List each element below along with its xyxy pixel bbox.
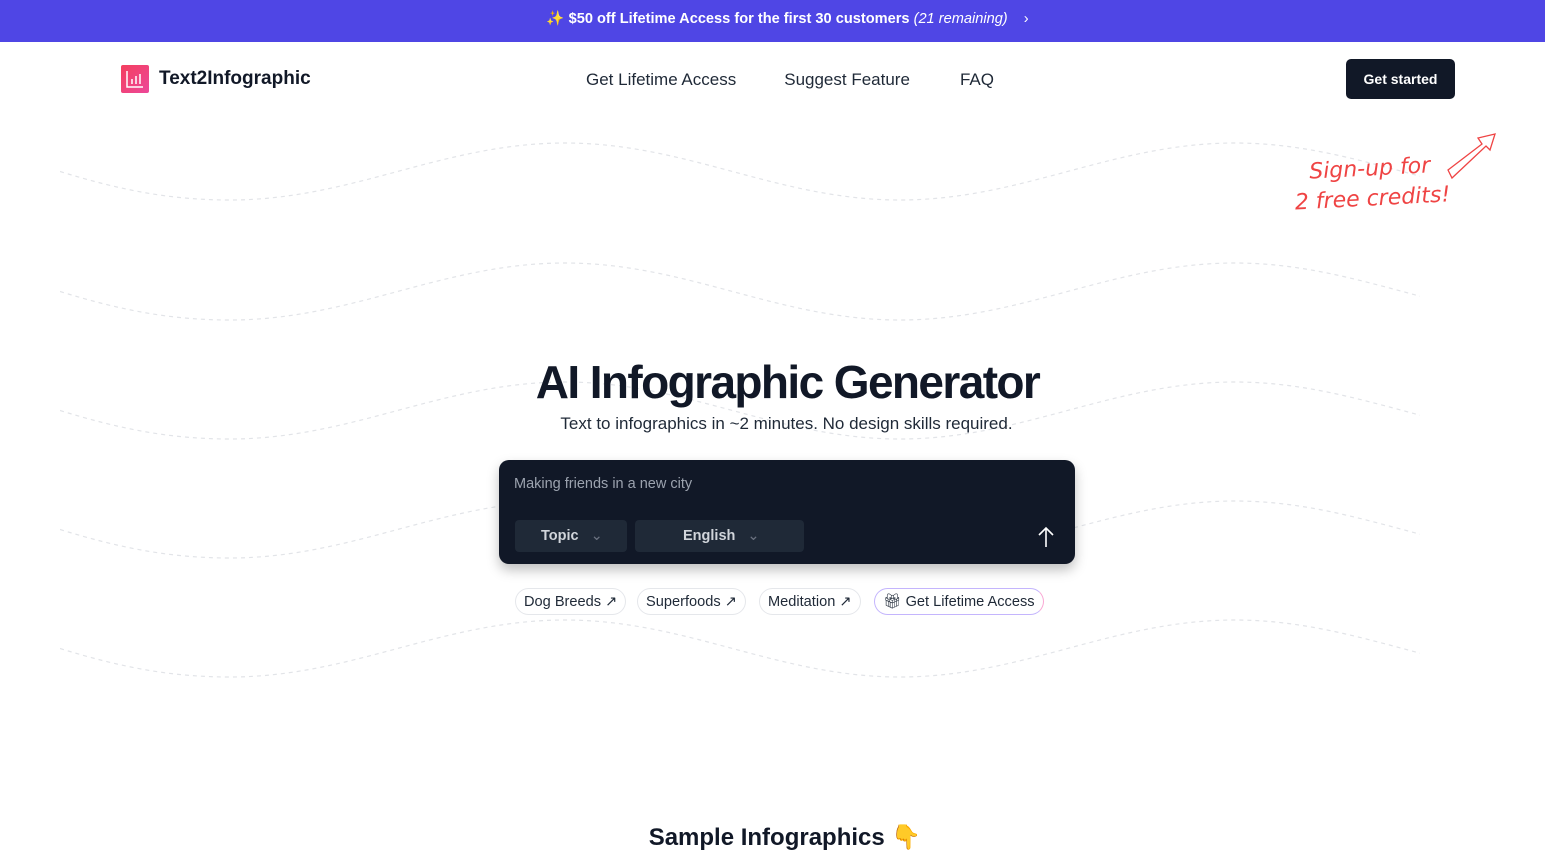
promo banner xyxy=(0,0,1545,42)
heading: sample infographics: Sample Infographics 👇 xyxy=(649,824,921,851)
pills: Dog Breeds ↗ xyxy=(524,594,617,610)
input panel: Making friends in a new city xyxy=(514,476,692,492)
input panel xyxy=(499,460,1075,564)
subtitle: Text to infographics in ~2 minutes. No design skills required. xyxy=(560,414,1013,433)
text: Superfoods ↗ xyxy=(646,594,737,610)
button: get started xyxy=(1346,59,1455,99)
pills xyxy=(515,588,626,615)
background waves xyxy=(60,142,1420,678)
arrow xyxy=(1447,133,1496,180)
icon: submit arrow xyxy=(1038,527,1054,547)
title: AI Infographic Generator xyxy=(536,356,1039,408)
dropdown: english xyxy=(635,520,804,552)
icon: chart logo xyxy=(121,65,149,93)
callout: sign-up: 2 free credits! xyxy=(1294,182,1451,215)
text: Meditation ↗ xyxy=(768,594,852,610)
promo banner: ✨ $50 off Lifetime Access for the first 30 customers (21 remaining) › xyxy=(546,11,1029,27)
dropdown: topic xyxy=(515,520,627,552)
dropdown: english: English ⌄ xyxy=(683,528,760,544)
logo: Text2Infographic xyxy=(159,68,311,89)
dropdown: topic: Topic ⌄ xyxy=(541,528,603,544)
button: get started: Get started xyxy=(1364,71,1437,87)
callout: sign-up: Sign-up for xyxy=(1309,153,1431,185)
callout: sign-up xyxy=(1294,133,1496,215)
nav links: Get Lifetime Access Suggest Feature FAQ xyxy=(586,70,994,89)
text: 🎁︎ Get Lifetime Access xyxy=(883,594,1035,610)
logo xyxy=(121,65,311,93)
